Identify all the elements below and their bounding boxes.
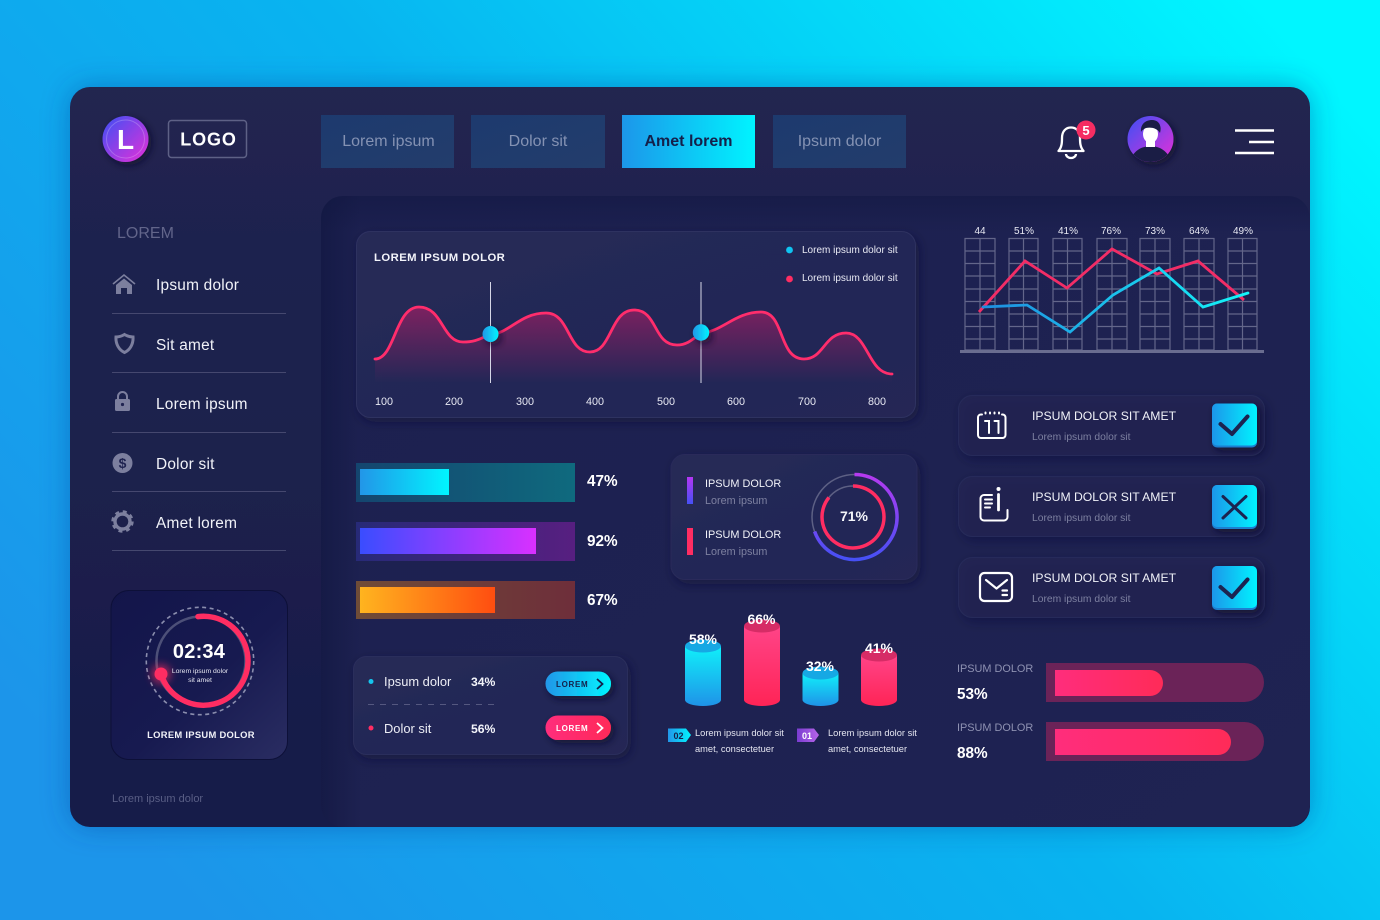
tab: Dolor sit — [471, 115, 605, 168]
logo badge — [102, 116, 148, 162]
tab: Ipsum dolor — [773, 115, 906, 168]
cylinder legend 02: Lorem ipsum dolor sit — [695, 728, 784, 738]
cylinder 66%: 66% — [747, 611, 776, 627]
panel: list with buttons: Ipsum dolor — [384, 674, 452, 689]
cylinder 66% — [744, 611, 780, 706]
x axis labels: 200 — [445, 396, 463, 408]
x axis labels — [375, 396, 886, 408]
bar 47% — [356, 463, 618, 502]
cylinder 32% — [802, 658, 838, 706]
cylinder legend 01: 01 — [802, 731, 812, 741]
panel: donut chart — [671, 454, 917, 580]
tab: Lorem ipsum — [321, 115, 454, 168]
menu item: Amet lorem — [112, 512, 286, 550]
tab: Dolor sit: Dolor sit — [509, 133, 568, 150]
chart legend: Lorem ipsum dolor sit — [802, 273, 898, 284]
menu item: Dolor sit: $ — [119, 455, 127, 471]
value labels — [974, 226, 1253, 237]
sidebar footer text: Lorem ipsum dolor — [112, 793, 203, 805]
tab: Amet lorem active — [622, 115, 755, 168]
dashed timer ring — [146, 607, 254, 715]
cylinder legend 01 — [797, 728, 917, 754]
panel: list with buttons: 56% — [471, 722, 496, 736]
icon: user avatar — [1128, 116, 1178, 167]
panel: pink progress 88% — [957, 722, 1264, 762]
dashboard panel — [70, 87, 1310, 827]
value labels: 44 — [974, 226, 986, 237]
logo wordmark — [168, 120, 246, 158]
bar 92% — [356, 522, 618, 561]
cylinder 32%: 32% — [806, 658, 835, 674]
panel: donut chart: IPSUM DOLOR — [705, 529, 781, 541]
x axis labels: 400 — [586, 396, 604, 408]
chart: cylinders — [685, 611, 897, 706]
menu item: Dolor sit: Dolor sit — [156, 456, 215, 473]
bar 92%: 92% — [587, 533, 618, 550]
x axis labels: 700 — [798, 396, 816, 408]
task card: note, crossed — [958, 476, 1264, 536]
panel: pink progress 88%: IPSUM DOLOR — [957, 722, 1033, 734]
icon: menu — [1235, 130, 1274, 153]
panel: pink progress 88%: 88% — [957, 745, 988, 762]
panel: donut chart: Lorem ipsum — [705, 546, 767, 558]
panel: list with buttons: Dolor sit — [384, 721, 432, 736]
panel: list with buttons: 34% — [471, 675, 496, 689]
sidebar menu — [112, 275, 286, 550]
menu item: Lorem ipsum — [112, 392, 286, 432]
panel: progress bars — [356, 463, 618, 619]
sidebar heading: LOREM — [117, 225, 174, 242]
menu item: Dolor sit — [112, 453, 286, 492]
x axis labels: 100 — [375, 396, 393, 408]
panel: donut chart: Lorem ipsum — [705, 495, 767, 507]
menu item: Ipsum dolor: Ipsum dolor — [156, 277, 239, 294]
icon: notification bell: 5 — [1082, 123, 1090, 138]
grid columns — [965, 238, 1257, 350]
button: pink: LOREM — [556, 724, 588, 733]
chart legend: Lorem ipsum dolor sit — [802, 245, 898, 256]
panel: countdown timer: 02:34 — [173, 641, 226, 663]
cylinder 58%: 58% — [689, 631, 718, 647]
task card: envelope, checked: Lorem ipsum dolor sit — [1032, 594, 1131, 605]
timer progress ring — [151, 616, 248, 706]
panel: task cards — [958, 396, 1264, 618]
blue line — [983, 268, 1248, 332]
value labels: 64% — [1189, 226, 1209, 237]
panel: pink progress 53%: IPSUM DOLOR — [957, 663, 1033, 675]
donut rings: 71% — [840, 508, 869, 524]
tab: Ipsum dolor: Ipsum dolor — [798, 133, 882, 150]
red line — [979, 249, 1244, 312]
navigation tabs — [321, 115, 906, 168]
cylinder 41% — [861, 640, 897, 706]
task card: envelope, checked — [958, 558, 1264, 618]
panel: countdown timer: Lorem ipsum dolor — [172, 668, 229, 675]
panel: pink progress 53% — [957, 663, 1264, 703]
donut rings — [812, 474, 897, 560]
icon: notification bell — [1058, 120, 1096, 158]
task card: calendar, checked: Lorem ipsum dolor sit — [1032, 432, 1131, 443]
cylinder 58% — [685, 631, 721, 706]
panel: area chart — [356, 232, 916, 418]
value labels: 76% — [1101, 226, 1121, 237]
x axis labels: 600 — [727, 396, 745, 408]
chart legend — [786, 245, 898, 284]
x axis labels: 800 — [868, 396, 886, 408]
bar 47%: 47% — [587, 473, 618, 490]
value labels: 49% — [1233, 226, 1253, 237]
value labels: 41% — [1058, 226, 1078, 237]
cylinder legend 02: 02 — [673, 731, 684, 741]
tab: Lorem ipsum: Lorem ipsum — [342, 133, 435, 150]
panel: area chart: LOREM IPSUM DOLOR — [374, 252, 505, 264]
bar 67%: 67% — [587, 592, 618, 609]
x axis labels: 500 — [657, 396, 675, 408]
logo wordmark: LOGO — [180, 130, 237, 150]
bar 67% — [356, 581, 618, 619]
logo badge: L — [117, 124, 134, 155]
menu item: Lorem ipsum: Lorem ipsum — [156, 396, 248, 413]
panel: countdown timer: sit amet — [188, 677, 212, 684]
menu item: Amet lorem: Amet lorem — [156, 515, 237, 532]
cylinder legend 02: amet, consectetuer — [695, 744, 774, 754]
cylinder legend 02 — [668, 728, 784, 754]
task card: envelope, checked: IPSUM DOLOR SIT AMET — [1032, 571, 1177, 585]
cylinder legend 01: amet, consectetuer — [828, 744, 907, 754]
menu item: Sit amet: Sit amet — [156, 337, 215, 354]
button: cyan — [546, 672, 611, 696]
button: cyan: LOREM — [556, 680, 588, 689]
chart: line chart on grid — [960, 226, 1264, 353]
task card: note, crossed: Lorem ipsum dolor sit — [1032, 513, 1131, 524]
cylinder legend 01: Lorem ipsum dolor sit — [828, 728, 917, 738]
tab: Amet lorem active: Amet lorem — [644, 133, 733, 150]
x axis labels: 300 — [516, 396, 534, 408]
button: pink — [546, 716, 611, 740]
cylinder 41%: 41% — [865, 640, 894, 656]
menu item: Sit amet — [112, 334, 286, 372]
task card: note, crossed: IPSUM DOLOR SIT AMET — [1032, 490, 1177, 504]
panel: list with buttons — [354, 656, 628, 754]
menu item: Ipsum dolor — [112, 275, 286, 314]
panel: countdown timer: LOREM IPSUM DOLOR — [147, 729, 255, 740]
panel: countdown timer — [111, 590, 288, 760]
value labels: 73% — [1145, 226, 1165, 237]
panel: pink progress 53%: 53% — [957, 686, 988, 703]
value labels: 51% — [1014, 226, 1034, 237]
task card: calendar, checked: IPSUM DOLOR SIT AMET — [1032, 409, 1177, 423]
panel: donut chart: IPSUM DOLOR — [705, 478, 781, 490]
task card: calendar, checked — [958, 396, 1264, 456]
area curve — [375, 282, 892, 383]
